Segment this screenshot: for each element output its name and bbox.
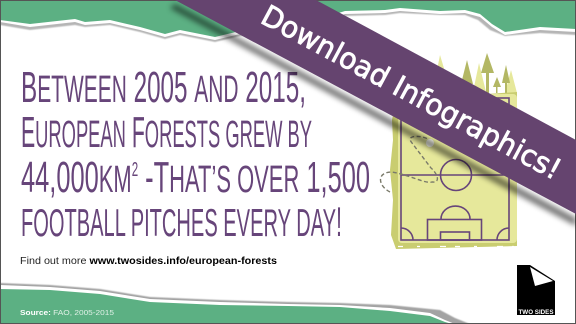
headline: 2 (132, 159, 138, 181)
top torn green band (0, 0, 576, 42)
find out more line: Find out more www.twosides.info/european-forests (20, 256, 277, 267)
dashed ball path (380, 136, 437, 192)
headline: 44,000KM (21, 153, 156, 202)
Two Sides logo (517, 265, 555, 316)
headline: EUROPEAN FORESTS GREW BY (21, 108, 312, 157)
headline (21, 63, 370, 245)
headline: HAT’S OVER 1,500 (169, 153, 422, 202)
source: Source: FAO, 2005-2015 (20, 308, 114, 317)
headline: BETWEEN 2005 AND 2015, (21, 63, 306, 112)
ribbon text: Download Infographics! (256, 0, 567, 186)
Two Sides logo: TWO SIDES (518, 309, 554, 316)
pitch ground (390, 92, 517, 249)
shadow under ribbon (170, 4, 576, 226)
bottom torn green band (0, 283, 470, 324)
pitch lines (401, 98, 509, 240)
headline: -T (138, 153, 169, 202)
trees (432, 53, 517, 95)
illustration: football pitch with trees (380, 53, 517, 249)
